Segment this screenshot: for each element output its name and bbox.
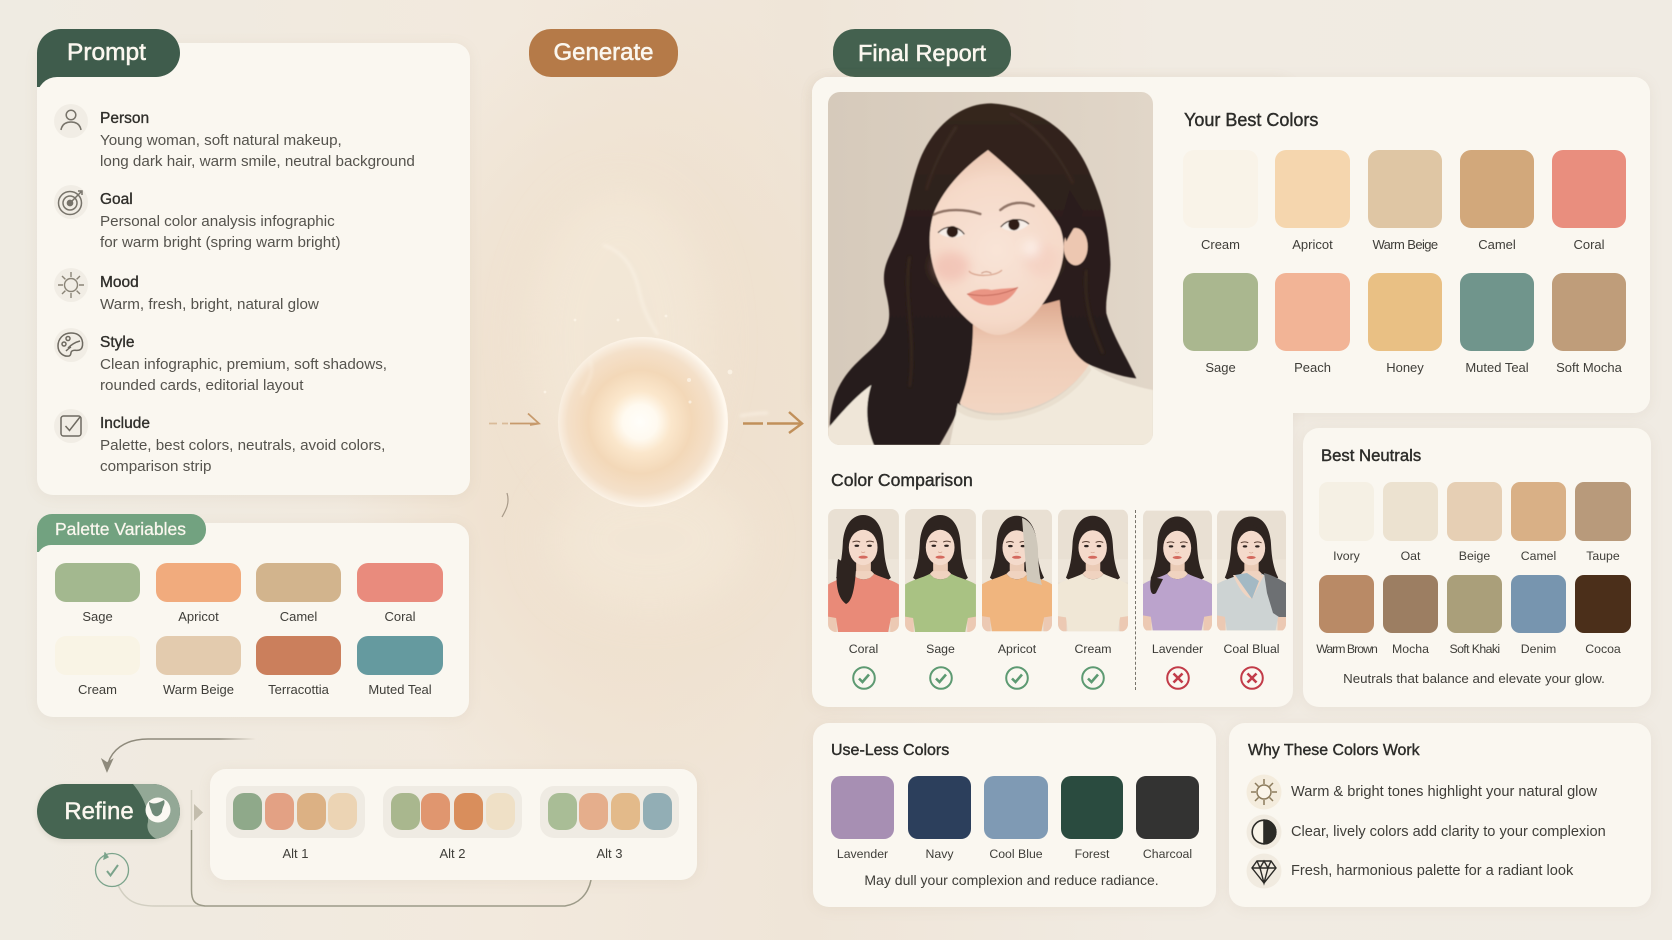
swatch: Forest: Forest [1075, 847, 1109, 861]
swatch: Terracottia [256, 636, 341, 697]
alternative palette: Alt 2 [383, 786, 522, 861]
swatch: Peach: Peach [1294, 360, 1331, 375]
swatch: Coral [1552, 150, 1626, 252]
swatch: Cocoa [1575, 575, 1631, 659]
caption: Neutrals that balance and elevate your glow. [1343, 671, 1605, 686]
panel: alternatives [210, 769, 697, 880]
icon: check [852, 666, 876, 690]
swatch: Apricot: Apricot [1292, 237, 1333, 252]
heading: Color Comparison: Color Comparison [831, 470, 973, 490]
item: Include: comparison strip [100, 458, 211, 474]
swatch: Coral: Coral [1573, 237, 1605, 252]
item: Style [54, 328, 387, 394]
swatch: Warm Beige [1368, 150, 1442, 252]
button: Refine: Refine [64, 798, 134, 825]
icon: half circle contrast [1246, 814, 1282, 850]
comparison: Coral: Coral [849, 642, 878, 656]
button: Generate [529, 29, 678, 77]
item: Include: Include [100, 415, 150, 432]
item: Include: Palette, best colors, neutrals, avoid colors, [100, 437, 385, 454]
alternative palette: Alt 3 [540, 786, 679, 861]
panel: use-less colors [813, 723, 1216, 907]
icon: cross [1240, 666, 1264, 690]
swatch: Terracottia: Terracottia [268, 682, 329, 697]
swatch: Camel: Camel [1521, 549, 1556, 563]
arrow: alternatives loop [118, 790, 592, 907]
comparison: Coral [828, 509, 899, 690]
swatch: Cream: Cream [1201, 237, 1240, 252]
swatch: Peach [1275, 273, 1350, 375]
swatch: Lavender [831, 776, 894, 864]
swatch: Apricot [1275, 150, 1350, 252]
comparison: Lavender [1143, 509, 1212, 690]
button: Refine [37, 784, 180, 839]
icon: refresh check [94, 852, 130, 888]
heading: Your Best Colors: Your Best Colors [1184, 110, 1318, 130]
swatch: Camel: Camel [1478, 237, 1516, 252]
swatch: Cream: Cream [78, 682, 117, 697]
swatch: Muted Teal: Muted Teal [1465, 360, 1529, 375]
swatch: Cream [55, 636, 140, 697]
swatch: Oat: Oat [1401, 549, 1420, 563]
panel: prompt [37, 29, 470, 495]
item: Goal: Goal [100, 191, 133, 208]
item: Mood: Mood [100, 274, 139, 291]
alternative palette: Alt 1: Alt 1 [282, 846, 308, 861]
section: your best colors [1183, 110, 1626, 375]
button: Final Report: Final Report [858, 40, 986, 66]
item: Person: Person [100, 110, 149, 127]
panel: color comparison [828, 470, 1286, 690]
panel: palette variables [37, 514, 469, 717]
swatch: Honey: Honey [1386, 360, 1424, 375]
comparison: Apricot: Apricot [998, 642, 1036, 656]
reason: harmony [1246, 853, 1636, 889]
comparison: Apricot [982, 509, 1052, 690]
swatch: Soft Khaki: Soft Khaki [1449, 642, 1500, 656]
swatch: Oat [1383, 482, 1438, 566]
swatch: Warm Beige: Warm Beige [163, 682, 234, 697]
alternative palette: Alt 1 [226, 786, 365, 861]
swatch: Muted Teal: Muted Teal [368, 682, 432, 697]
swatch: Taupe [1575, 482, 1631, 566]
icon: check [1005, 666, 1029, 690]
reason: warm and bright: Warm & bright tones highlight your natural glow [1291, 784, 1597, 800]
swatch: Mocha [1383, 575, 1438, 659]
item: Style: Clean infographic, premium, soft shadows, [100, 356, 387, 373]
icon: cross [1166, 666, 1190, 690]
swatch: Warm Beige [156, 636, 241, 697]
item: Goal: Personal color analysis infographic [100, 213, 335, 230]
swatch: Beige: Beige [1459, 549, 1490, 563]
item: Person [54, 104, 415, 170]
arrow: generate to report [743, 411, 804, 434]
swatch: Sage [1183, 273, 1258, 375]
swatch: Apricot: Apricot [178, 609, 219, 624]
swatch: Sage: Sage [1205, 360, 1236, 375]
item: Mood [54, 268, 319, 313]
icon: palette [54, 328, 88, 362]
icon: check [1081, 666, 1105, 690]
icon: person [54, 104, 88, 138]
panel: final report [810, 76, 1650, 707]
swatch: Charcoal: Charcoal [1143, 847, 1192, 861]
item: Mood: Warm, fresh, bright, natural glow [100, 296, 319, 313]
item: Style: rounded cards, editorial layout [100, 376, 303, 394]
arrow: prompt to generate [489, 413, 541, 426]
item: Person: Young woman, soft natural makeup, [100, 132, 342, 149]
icon: checkbox [54, 409, 88, 443]
reason: warm and bright [1246, 774, 1636, 810]
swatch: Denim [1511, 575, 1566, 659]
swatch: Navy: Navy [925, 847, 954, 861]
icon: diamond [1246, 853, 1282, 889]
item: Goal: for warm bright (spring warm bright) [100, 234, 341, 250]
reason: clarity: Clear, lively colors add clarity to your complexion [1291, 824, 1606, 840]
alternative palette: Alt 3: Alt 3 [596, 846, 622, 861]
item: Person: long dark hair, warm smile, neutral background [100, 152, 415, 170]
button: Final Report [833, 29, 1011, 77]
swatch: Soft Khaki [1447, 575, 1502, 659]
panel: why these colors work [1229, 723, 1651, 907]
swatch: Coral: Coral [384, 609, 416, 624]
swatch: Warm Beige: Warm Beige [1372, 237, 1438, 252]
swatch: Camel [1460, 150, 1534, 252]
heading: Why These Colors Work: Why These Colors Work [1248, 742, 1420, 759]
heading: Best Neutrals: Best Neutrals [1321, 446, 1421, 465]
swatch: Camel [1511, 482, 1566, 566]
reason: harmony: Fresh, harmonious palette for a radiant look [1291, 863, 1573, 879]
swatch: Forest [1061, 776, 1123, 864]
heading tab: Prompt: Prompt [67, 39, 146, 66]
item: Goal [54, 185, 341, 250]
heading tab: Palette Variables [37, 514, 206, 545]
heading: Use-Less Colors: Use-Less Colors [831, 742, 949, 759]
comparison: Lavender: Lavender [1152, 642, 1203, 656]
swatch: Charcoal [1136, 776, 1199, 864]
icon: chevron arrow to alternatives [194, 804, 203, 821]
swatch: Honey [1368, 273, 1442, 375]
comparison: Coal Blual: Coal Blual [1223, 642, 1280, 656]
heading tab: Prompt [37, 29, 180, 77]
swatch: Taupe: Taupe [1586, 549, 1620, 563]
swatch: Cocoa: Cocoa [1585, 642, 1621, 656]
swatch: Soft Mocha: Soft Mocha [1556, 360, 1622, 375]
heading tab: Palette Variables: Palette Variables [55, 519, 186, 539]
icon: sun [1246, 774, 1282, 810]
swatch: Apricot [156, 563, 241, 624]
swatch: Coral [357, 563, 443, 624]
item: Style: Style [100, 334, 134, 351]
swatch: Muted Teal [1460, 273, 1534, 375]
item: Include [54, 409, 385, 474]
swatch: Beige [1447, 482, 1502, 566]
icon: sun [54, 268, 88, 302]
swatch: Lavender: Lavender [837, 847, 888, 861]
portrait photo [828, 92, 1153, 445]
swatch: Mocha: Mocha [1392, 642, 1429, 656]
swatch: Warm Brown: Warm Brown [1316, 642, 1377, 656]
swatch: Navy [908, 776, 971, 864]
generate glow orb [502, 243, 766, 524]
alternative palette: Alt 2: Alt 2 [439, 846, 466, 861]
comparison: Sage: Sage [926, 642, 955, 656]
swatch: Ivory: Ivory [1333, 549, 1360, 563]
swatch: Cool Blue [984, 776, 1048, 864]
swatch: Denim: Denim [1521, 642, 1556, 656]
panel: best neutrals [1303, 428, 1651, 707]
swatch: Soft Mocha [1552, 273, 1626, 375]
reason: clarity [1246, 814, 1636, 850]
swatch: Sage: Sage [82, 609, 113, 624]
comparison: Sage [905, 509, 976, 690]
swatch: Ivory [1319, 482, 1374, 566]
swatch: Camel: Camel [280, 609, 317, 624]
comparison: Cream [1058, 509, 1128, 690]
comparison: Cream: Cream [1075, 642, 1111, 656]
icon: target [54, 185, 88, 219]
button: Generate: Generate [553, 39, 654, 66]
swatch: Sage [55, 563, 140, 624]
swatch: Camel [256, 563, 341, 624]
swatch: Muted Teal [357, 636, 443, 697]
caption: May dull your complexion and reduce radiance. [864, 872, 1159, 888]
icon: check [928, 666, 952, 690]
swatch: Cool Blue: Cool Blue [989, 847, 1043, 861]
comparison: Coal Blual [1217, 509, 1286, 690]
arrow: feedback loop into refine [101, 738, 253, 773]
swatch: Warm Brown [1319, 575, 1374, 659]
